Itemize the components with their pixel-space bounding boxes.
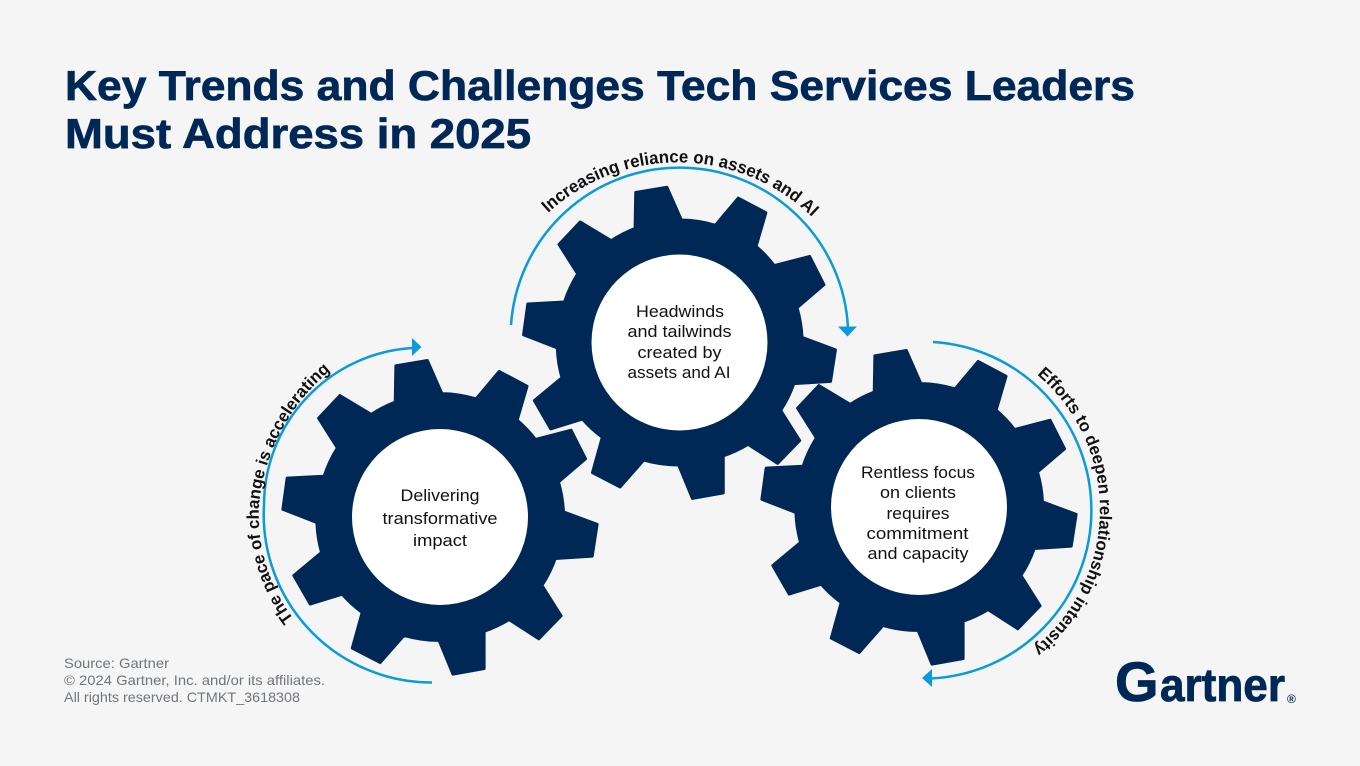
gear: relentless focus on clients: on clients [880, 483, 956, 502]
curved label: the pace of change: The pace of change is accelerating [246, 364, 330, 626]
gear: delivering transformative impact: Delivering [400, 486, 480, 505]
gear: headwinds and tailwinds: Headwinds [636, 302, 724, 321]
source and copyright: All rights reserved. CTMKT_3618308 [64, 689, 300, 705]
title [65, 62, 1135, 157]
source and copyright [64, 655, 325, 705]
source and copyright: Source: Gartner [64, 655, 169, 671]
source and copyright: © 2024 Gartner, Inc. and/or its affiliates. [64, 672, 325, 688]
arrow: top arc [511, 168, 857, 336]
gear: delivering transformative impact: transformative [382, 509, 498, 528]
gear: relentless focus on clients: and capacity [868, 544, 969, 563]
arrow: right arc [922, 342, 1091, 687]
logo: Gartner: ® [1287, 692, 1296, 706]
gear: relentless focus on clients: requires [886, 504, 950, 523]
logo: Gartner [1115, 650, 1296, 713]
gear: headwinds and tailwinds: created by [638, 343, 722, 362]
gear: relentless focus on clients: Rentless focus [861, 463, 975, 482]
title: Key Trends and Challenges Tech Services Leaders [65, 62, 1135, 109]
gear: relentless focus on clients: commitment [866, 524, 969, 543]
title: Must Address in 2025 [65, 110, 531, 157]
logo: Gartner: artner [1160, 659, 1285, 711]
gear: delivering transformative impact [283, 360, 597, 674]
curved label: increasing reliance: Increasing reliance on assets and AI [540, 152, 820, 216]
logo: Gartner: G [1115, 650, 1159, 713]
gear: delivering transformative impact: impact [413, 531, 467, 550]
gear: headwinds and tailwinds: and tailwinds [628, 322, 732, 341]
curved label: efforts to deepen: Efforts to deepen relationship intensity [1035, 366, 1112, 656]
gear: headwinds and tailwinds: assets and AI [628, 363, 730, 382]
gear: headwinds and tailwinds [523, 187, 836, 499]
arrow: left arc [264, 338, 432, 683]
gear: relentless focus on clients [762, 350, 1076, 664]
